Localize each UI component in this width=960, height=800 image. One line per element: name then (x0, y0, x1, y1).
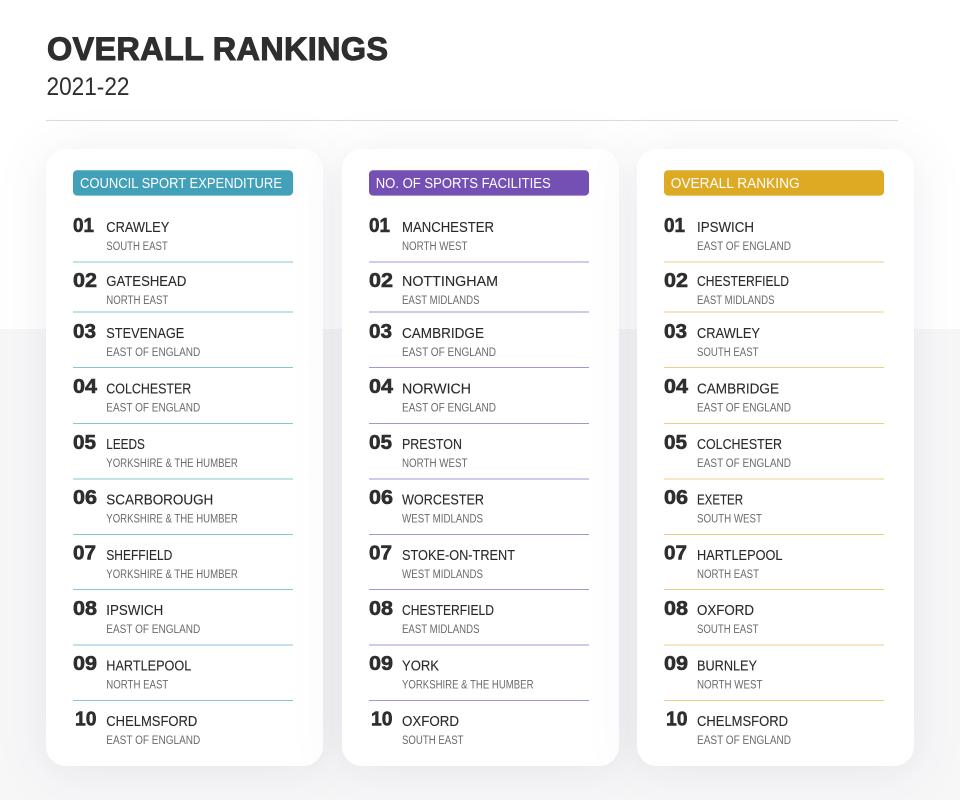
heading badge: council sport expenditure: COUNCIL SPORT EXPENDITURE (80, 176, 282, 192)
rank 04: 04 (664, 376, 689, 398)
rank 04: CAMBRIDGE (697, 382, 779, 398)
rank 07: 07 (369, 542, 392, 564)
rank 02: 02 (73, 270, 97, 292)
rank 04 (73, 376, 200, 414)
rank 04 (664, 376, 791, 414)
rank 07 (73, 542, 238, 581)
rank 02 (369, 270, 498, 307)
rank 04 (369, 376, 496, 414)
rank 10: 10 (666, 708, 688, 730)
rank 08: 08 (664, 598, 688, 620)
rank 05: LEEDS (106, 437, 145, 453)
panel: overall ranking (637, 149, 914, 766)
rank 01: 01 (664, 215, 685, 237)
rank 06: SCARBOROUGH (106, 492, 213, 508)
rank 10: OXFORD (402, 714, 459, 730)
rank 08: 08 (369, 598, 393, 620)
rank 09 (73, 653, 191, 692)
rank 03 (664, 321, 760, 359)
panel: number of sports facilities (342, 149, 619, 766)
rank 08: EAST MIDLANDS (402, 624, 480, 636)
rank 09: NORTH WEST (697, 680, 762, 692)
rank 02: GATESHEAD (106, 274, 186, 290)
rank 03: 03 (369, 321, 392, 343)
rank 03: 03 (73, 321, 96, 343)
rank 03: STEVENAGE (106, 326, 185, 342)
rank 08: 08 (73, 598, 97, 620)
rank 06: EXETER (697, 492, 743, 508)
rank 02: EAST MIDLANDS (402, 295, 480, 307)
rank 10 (371, 708, 464, 747)
rank 07: WEST MIDLANDS (402, 569, 483, 581)
heading badge: overall ranking: OVERALL RANKING (671, 176, 800, 192)
rank 08 (73, 598, 200, 636)
rank 01: 01 (73, 215, 94, 237)
rank 05: YORKSHIRE & THE HUMBER (106, 458, 238, 470)
rank 08: OXFORD (697, 603, 754, 619)
rank 03: CAMBRIDGE (402, 326, 484, 342)
rank 08 (664, 598, 758, 636)
rank 09: 09 (664, 653, 688, 675)
rank 09: YORK (402, 658, 439, 674)
rank 03: 03 (664, 321, 687, 343)
rank 04: EAST OF ENGLAND (402, 402, 496, 414)
rank 04: 04 (369, 376, 394, 398)
rank 10: SOUTH EAST (402, 735, 464, 747)
rank 06: YORKSHIRE & THE HUMBER (106, 514, 238, 526)
rank 03: CRAWLEY (697, 326, 760, 342)
rank 08: IPSWICH (106, 603, 163, 619)
heading badge: council sport expenditure (73, 170, 293, 196)
rank 01 (73, 215, 170, 253)
rank 07: NORTH EAST (697, 569, 759, 581)
rank 02 (73, 270, 186, 307)
rank 10: CHELMSFORD (106, 714, 197, 730)
rank 03 (369, 321, 496, 359)
rank 09: 09 (369, 653, 393, 675)
rank 04: COLCHESTER (106, 382, 191, 398)
rank 09: 09 (73, 653, 97, 675)
rank 05: 05 (369, 432, 392, 454)
rank 02: 02 (369, 270, 393, 292)
rank 06: WEST MIDLANDS (402, 514, 483, 526)
rank 01: NORTH WEST (402, 241, 468, 253)
rank 02: 02 (664, 270, 688, 292)
rank 08 (369, 598, 494, 636)
rank 03: EAST OF ENGLAND (106, 347, 200, 359)
rank 01 (369, 215, 494, 253)
rank 06 (73, 487, 238, 526)
rank 01: SOUTH EAST (106, 241, 168, 253)
rank 10: CHELMSFORD (697, 714, 788, 730)
rank 01: IPSWICH (697, 220, 754, 236)
rank 02: EAST MIDLANDS (697, 295, 775, 307)
title: OVERALL RANKINGS (47, 31, 388, 67)
rank 09: BURNLEY (697, 658, 757, 674)
rank 10: 10 (371, 708, 392, 730)
panel: council sport expenditure (46, 149, 323, 766)
rank 01: EAST OF ENGLAND (697, 241, 791, 253)
heading badge: no. of sports facilities: NO. OF SPORTS FACILITIES (376, 176, 551, 192)
rank 07: 07 (664, 542, 687, 564)
rank 06 (369, 487, 484, 526)
rank 05: 05 (73, 432, 96, 454)
subtitle: season: 2021-22 (46, 73, 130, 101)
rank 03: EAST OF ENGLAND (402, 347, 496, 359)
rank 10: EAST OF ENGLAND (106, 735, 200, 747)
heading badge: no. of sports facilities (369, 170, 589, 196)
rank 05: EAST OF ENGLAND (697, 458, 791, 470)
rank 07: STOKE-ON-TRENT (402, 548, 515, 564)
rank 05 (369, 432, 468, 470)
rank 09: HARTLEPOOL (106, 658, 191, 674)
rank 02 (664, 270, 789, 307)
rank 02: NORTH EAST (106, 295, 168, 307)
rank 01: 01 (369, 215, 390, 237)
rank 10 (666, 708, 791, 747)
rank 05: PRESTON (402, 437, 462, 453)
rank 08: CHESTERFIELD (402, 603, 494, 619)
rank 07: HARTLEPOOL (697, 548, 782, 564)
rank 10 (75, 708, 200, 747)
rank 07: SHEFFIELD (106, 548, 172, 564)
rank 09: NORTH EAST (106, 680, 168, 692)
rank 09: YORKSHIRE & THE HUMBER (402, 680, 534, 692)
rank 05: NORTH WEST (402, 458, 468, 470)
rank 02: CHESTERFIELD (697, 274, 789, 290)
rank 05 (664, 432, 791, 470)
rank 04: 04 (73, 376, 98, 398)
rank 01: CRAWLEY (106, 220, 170, 236)
rank 06: SOUTH WEST (697, 514, 762, 526)
rank 01 (664, 215, 791, 253)
rank 04: EAST OF ENGLAND (106, 402, 200, 414)
rank 06: WORCESTER (402, 492, 484, 508)
rank 09 (664, 653, 762, 692)
rank 02: NOTTINGHAM (402, 274, 498, 290)
rank 07: 07 (73, 542, 96, 564)
rank 10: EAST OF ENGLAND (697, 735, 791, 747)
rank 05: COLCHESTER (697, 437, 782, 453)
rank 09 (369, 653, 534, 692)
rank 07 (369, 542, 515, 581)
rank 01: MANCHESTER (402, 220, 494, 236)
rank 06: 06 (73, 487, 97, 509)
rank 03 (73, 321, 200, 359)
rank 05 (73, 432, 238, 470)
rank 06: 06 (664, 487, 688, 509)
rank 06: 06 (369, 487, 393, 509)
heading badge: overall ranking (664, 170, 884, 196)
rank 05: 05 (664, 432, 687, 454)
rank 04: EAST OF ENGLAND (697, 402, 791, 414)
rank 03: SOUTH EAST (697, 347, 758, 359)
rank 06 (664, 487, 762, 526)
rank 08: EAST OF ENGLAND (106, 624, 200, 636)
rank 10: 10 (75, 708, 96, 730)
rank 04: NORWICH (402, 382, 471, 398)
rank 07: YORKSHIRE & THE HUMBER (106, 569, 238, 581)
rank 08: SOUTH EAST (697, 624, 758, 636)
rank 07 (664, 542, 782, 581)
